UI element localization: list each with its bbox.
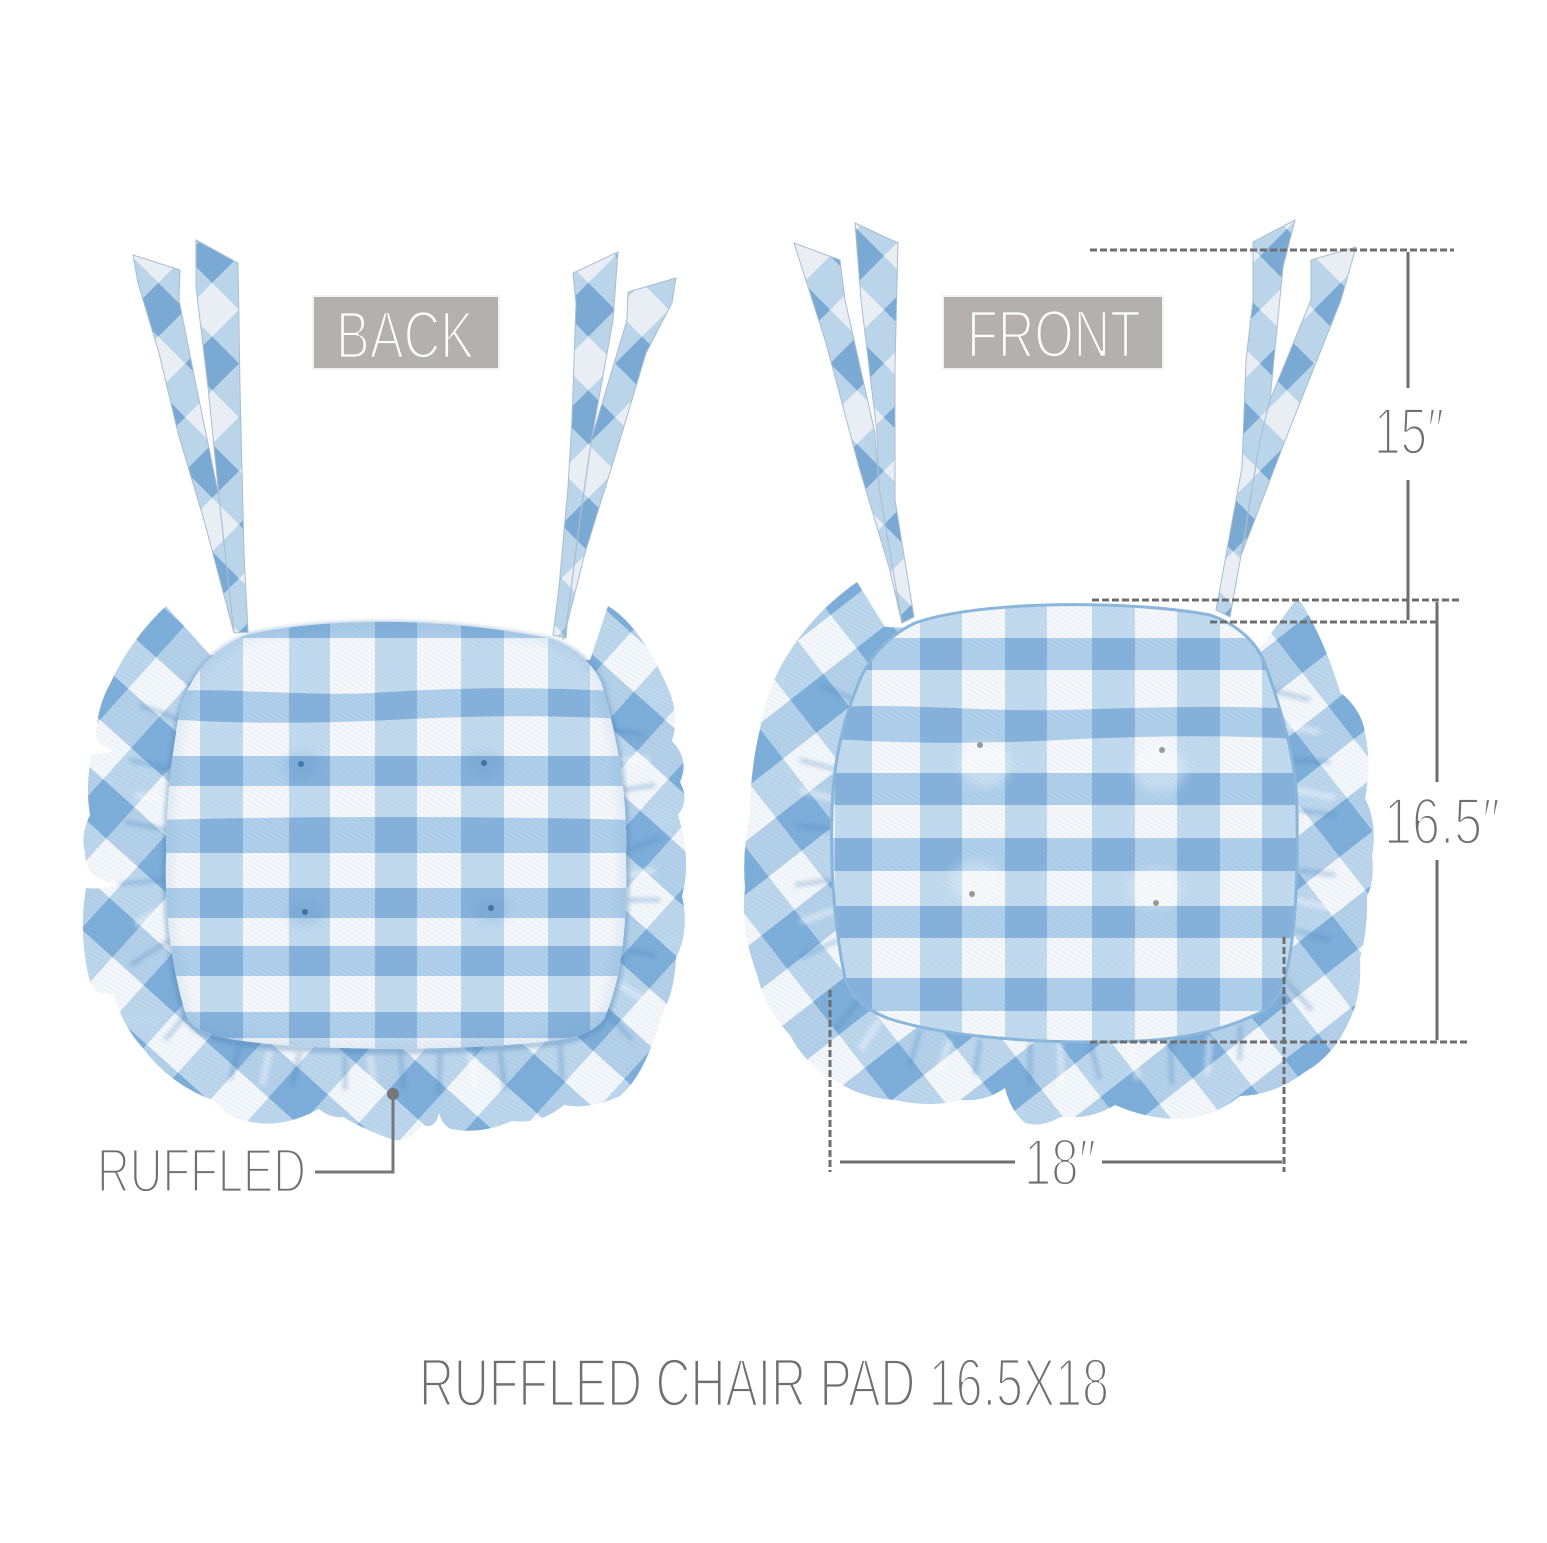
back cushion gingham	[166, 622, 626, 1049]
back tufts	[283, 752, 509, 926]
dimension: 18 inch width	[830, 937, 1284, 1199]
front ties right	[1216, 220, 1356, 617]
title: RUFFLED CHAIR PAD 16.5X18	[419, 1345, 1109, 1421]
back ruffle	[80, 600, 700, 1145]
back ties left	[133, 240, 248, 633]
back ties right	[553, 252, 676, 640]
front ruffle	[740, 580, 1380, 1130]
label: FRONT: FRONT	[967, 297, 1141, 372]
callout: ruffled	[97, 1088, 399, 1206]
dimension: 18 inch width: 18″	[1024, 1125, 1096, 1199]
front tufts	[949, 742, 1186, 908]
panel: back chair pad	[80, 240, 700, 1145]
dimension: 15 inch tie length: 15″	[1374, 394, 1444, 468]
dimension: 16.5 inch depth: 16.5″	[1384, 784, 1500, 858]
front cushion gingham	[833, 606, 1296, 1040]
callout: ruffled: RUFFLED	[97, 1137, 306, 1206]
front cushion piping	[832, 605, 1297, 1042]
label: BACK: BACK	[336, 298, 474, 373]
front ties left	[794, 223, 914, 623]
back cushion shadow	[166, 624, 626, 1051]
panel: front chair pad	[740, 220, 1380, 1130]
